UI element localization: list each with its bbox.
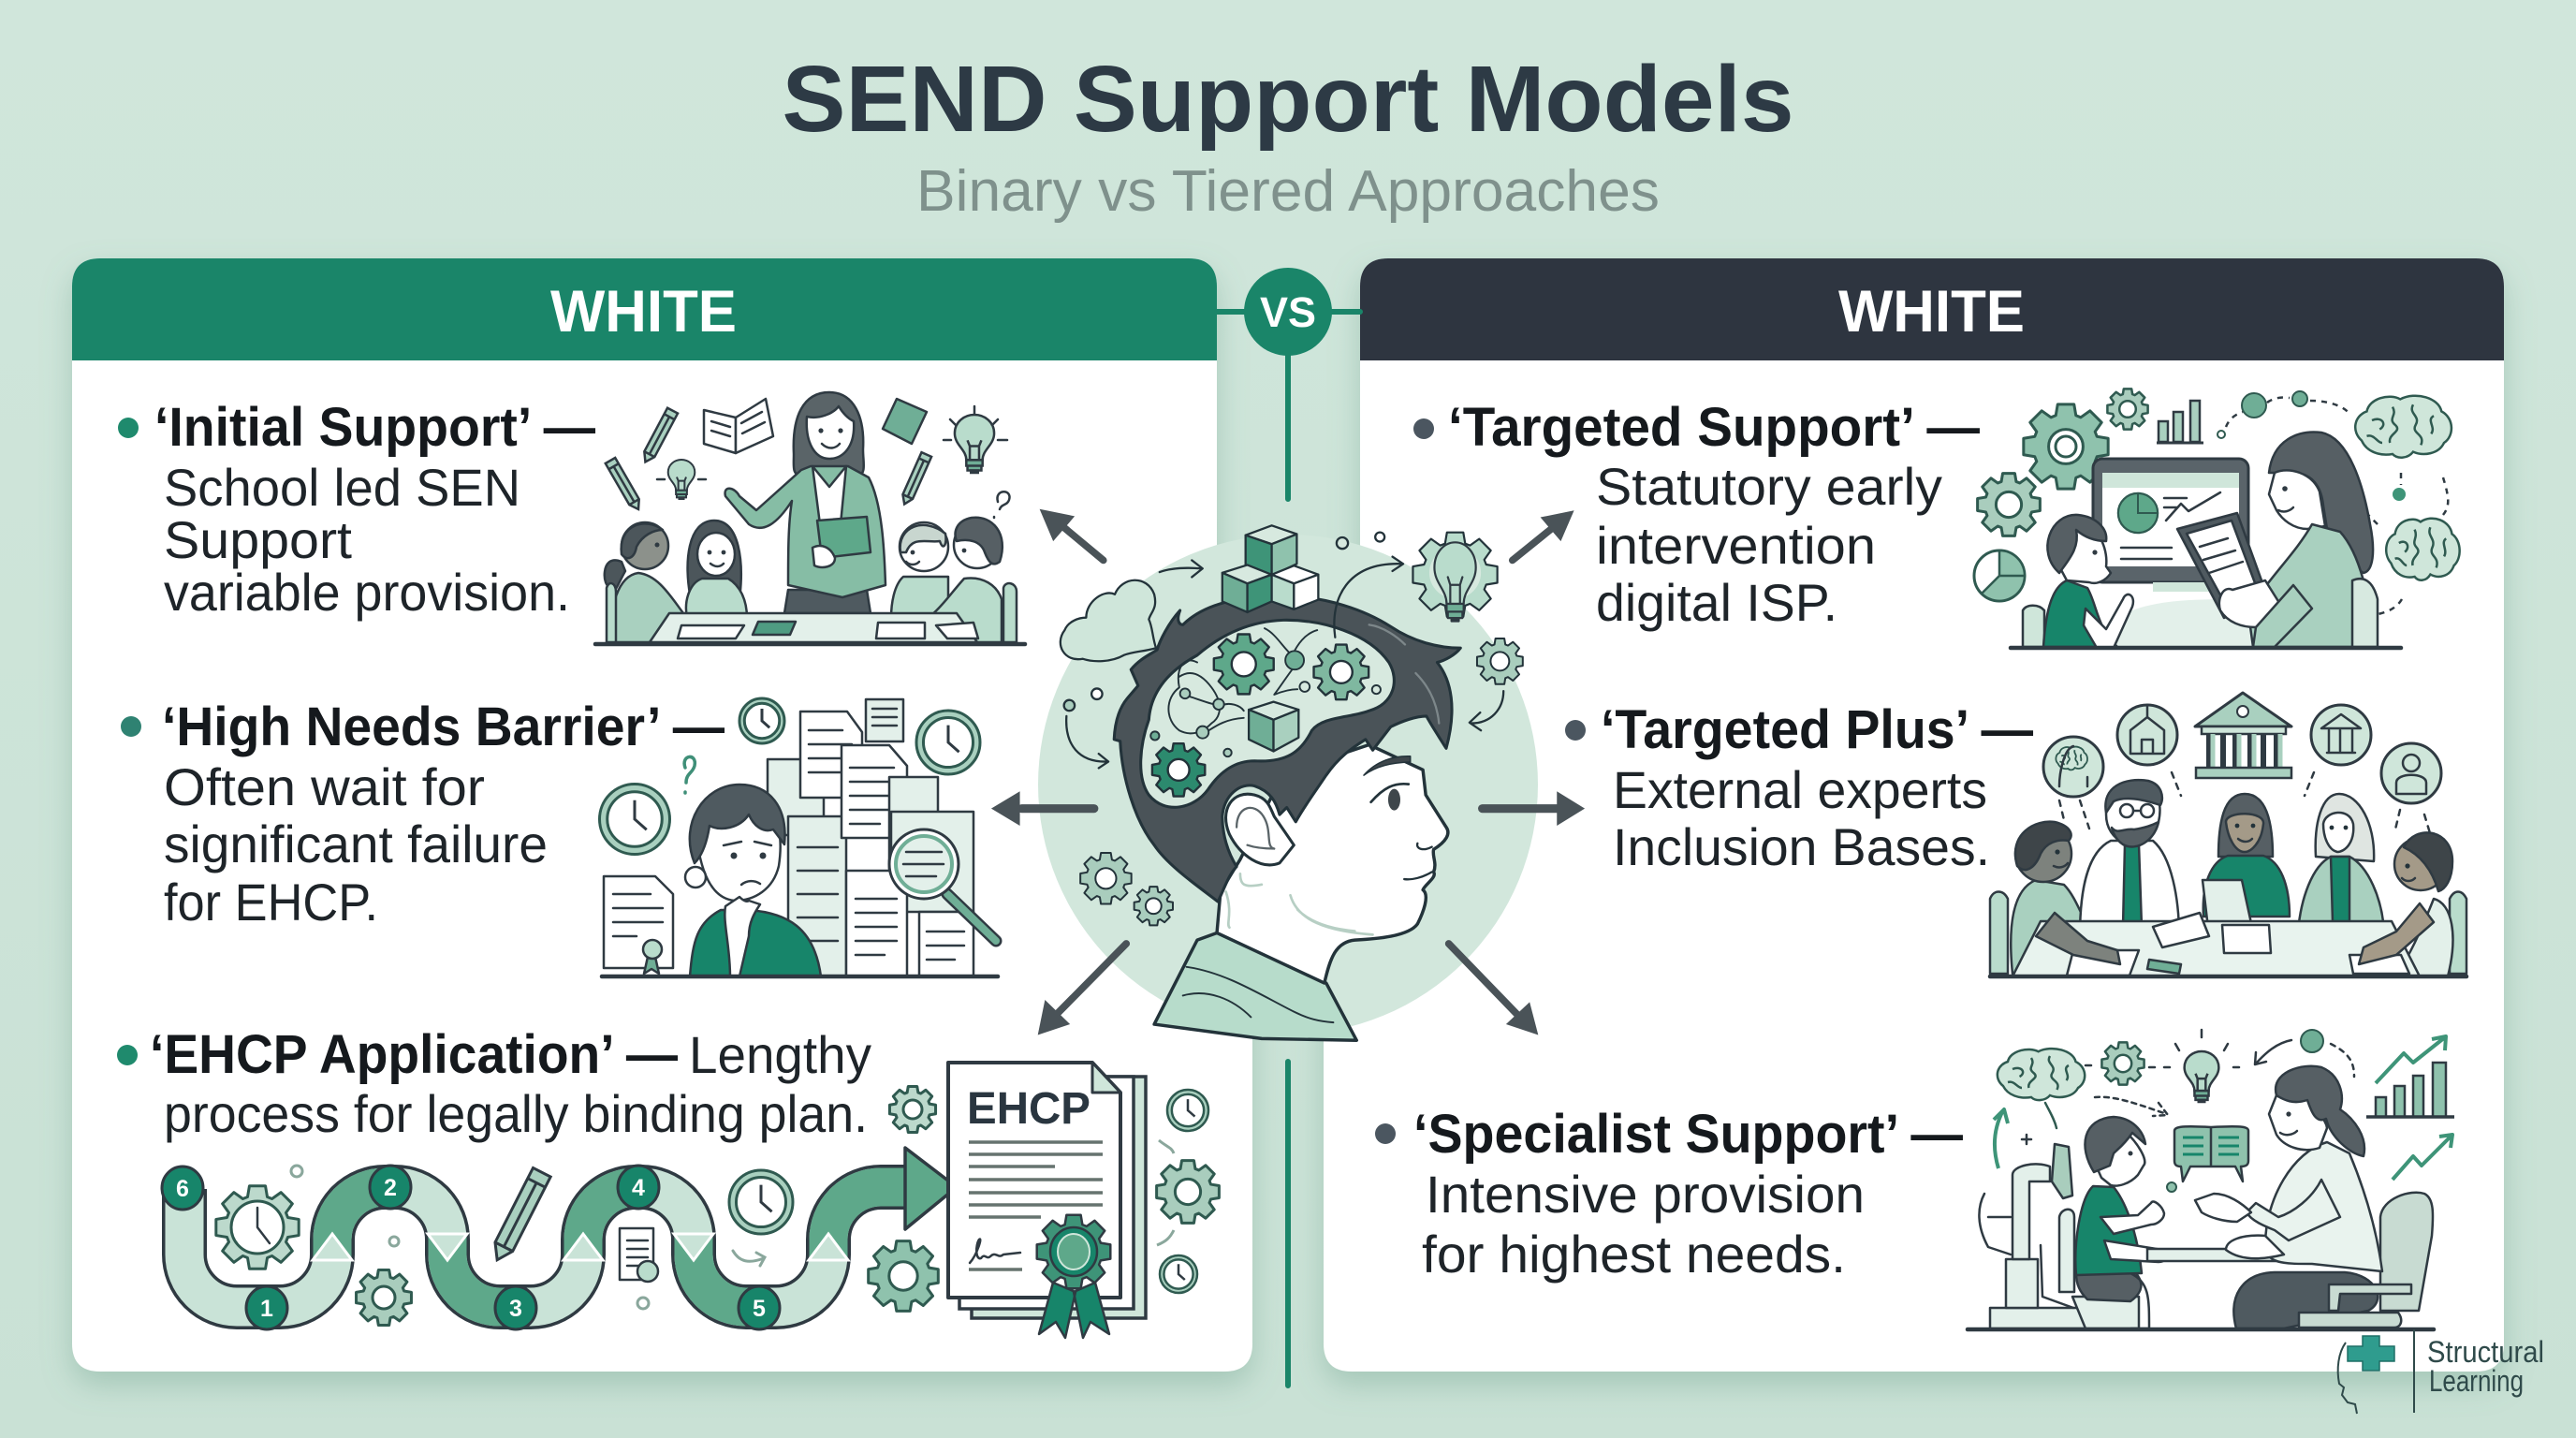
ear <box>1226 794 1294 865</box>
step 4: 4 <box>632 1175 645 1201</box>
text: ehcp application: process for legally binding plan. <box>164 1084 868 1143</box>
text: initial support: Support <box>164 510 352 569</box>
text: specialist support: Intensive provision <box>1426 1165 1865 1224</box>
text: initial support: variable provision. <box>164 563 570 622</box>
text: targeted support <box>1413 397 1980 632</box>
step 4 <box>618 1166 659 1209</box>
text: specialist support: ‘Specialist Support’ — <box>1413 1104 1963 1165</box>
illustration: specialist support session <box>1968 1030 2454 1329</box>
left panel body <box>72 258 1252 1372</box>
brain gears <box>1152 634 1368 797</box>
eye and brow <box>1364 756 1432 879</box>
text: targeted plus: Inclusion Bases. <box>1613 817 1990 876</box>
illustration: targeted plus team meeting <box>1990 693 2466 976</box>
vs connector with badge: VS <box>1260 288 1316 336</box>
right header label: WHITE <box>1838 279 2025 345</box>
text: initial support: ‘Initial Support’ — <box>154 397 595 458</box>
arrow: to initial support <box>1040 509 1104 560</box>
cloud <box>1061 580 1156 661</box>
step 1 <box>246 1286 287 1329</box>
face and neck <box>1217 745 1448 983</box>
logo: structural learning <box>2338 1329 2544 1414</box>
text: targeted plus: External experts <box>1613 760 1987 819</box>
step 2 <box>370 1166 411 1209</box>
shirt <box>1154 932 1356 1040</box>
illustration: targeted support digital plan <box>1974 389 2460 648</box>
vs connector with badge <box>1217 268 1360 1386</box>
brain area <box>1141 620 1394 807</box>
step 1: 1 <box>260 1296 273 1322</box>
step 5 <box>739 1286 780 1329</box>
step 6 <box>162 1167 203 1210</box>
thin flow arrows and dots <box>1064 533 1503 768</box>
step 3: 3 <box>509 1296 522 1322</box>
hair <box>1114 596 1460 902</box>
text: targeted plus: ‘Targeted Plus’ — <box>1601 699 2033 760</box>
road decorations: gears, pencil, clock, clipboard <box>216 1166 938 1325</box>
arrow: to specialist support <box>1449 944 1538 1035</box>
title: SEND Support Models <box>783 47 1793 152</box>
text: targeted support: ‘Targeted Support’ — <box>1448 397 1980 458</box>
illustration: ehcp document with rosette <box>889 1063 1219 1338</box>
logo: structural learning: Learning <box>2429 1364 2524 1398</box>
text: targeted plus <box>1565 699 2033 876</box>
bulb gear <box>1412 533 1498 622</box>
text: ehcp application <box>117 1024 871 1143</box>
panel: right tiered model <box>1324 258 2504 1372</box>
step 6: 6 <box>176 1176 189 1202</box>
right panel header <box>1360 258 2504 360</box>
text: ehcp application: ‘EHCP Application’ — <box>150 1024 678 1085</box>
text: high needs barrier: significant failure <box>164 814 548 873</box>
text: specialist support <box>1375 1104 1963 1284</box>
step 3 <box>495 1286 536 1329</box>
central circle backdrop <box>1038 535 1538 1034</box>
floating gears <box>1080 638 1523 925</box>
text: high needs barrier: for EHCP. <box>164 873 378 932</box>
stacked cubes <box>1222 525 1318 612</box>
text: high needs barrier <box>121 697 724 932</box>
right panel body <box>1324 258 2504 1372</box>
arrow: to targeted support <box>1513 510 1574 560</box>
left header label: WHITE <box>550 279 737 345</box>
arrow: to ehcp application <box>1038 944 1126 1035</box>
text: targeted support: Statutory early <box>1596 457 1942 516</box>
text: initial support <box>118 397 595 622</box>
brain cube <box>1249 702 1298 751</box>
left panel header <box>72 258 1217 360</box>
illustration: child waiting among paperwork <box>599 698 998 976</box>
text: initial support: School led SEN <box>164 458 520 517</box>
process road with numbered steps <box>162 1148 957 1329</box>
text: targeted support: intervention <box>1596 516 1876 575</box>
arrow: to high needs barrier <box>991 791 1094 826</box>
illustration: child profile with thinking brain <box>991 509 1585 1040</box>
subtitle: Binary vs Tiered Approaches <box>916 159 1660 224</box>
panel: left binary model <box>72 258 1252 1372</box>
step 2: 2 <box>384 1175 397 1201</box>
illustration: teacher with pupils <box>595 392 1025 644</box>
text: targeted support: digital ISP. <box>1596 573 1837 632</box>
ehcp label: EHCP <box>967 1084 1090 1134</box>
text: high needs barrier: Often wait for <box>164 757 485 816</box>
step 5: 5 <box>753 1296 766 1322</box>
text: ehcp application: Lengthy <box>689 1025 871 1084</box>
jaw shading <box>1226 873 1373 934</box>
arrow: to targeted plus <box>1483 791 1585 826</box>
logo: structural learning: Structural <box>2427 1335 2544 1369</box>
text: high needs barrier: ‘High Needs Barrier’ — <box>162 697 724 757</box>
text: specialist support: for highest needs. <box>1422 1225 1846 1284</box>
